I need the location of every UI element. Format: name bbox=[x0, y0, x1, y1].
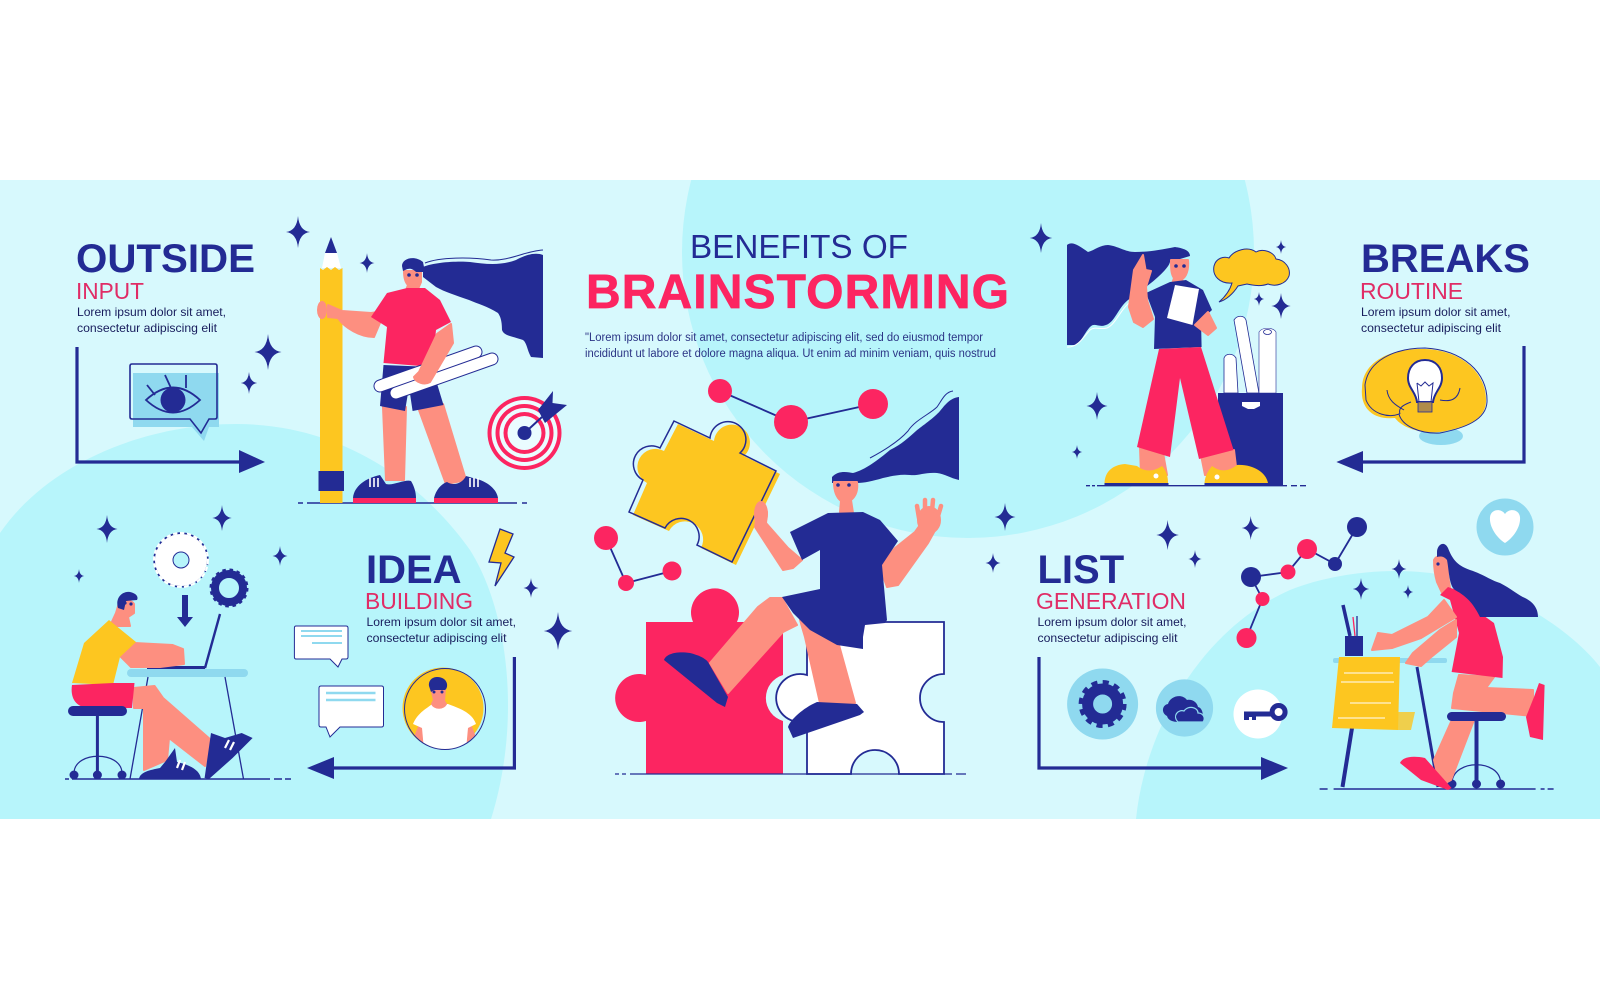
section: list generation text bbox=[1036, 548, 1186, 645]
stars: centre bbox=[986, 503, 1016, 573]
section: outside input text: OUTSIDE bbox=[76, 237, 255, 281]
illustration: woman with paper bbox=[1067, 243, 1268, 486]
arrow: list generation bbox=[1039, 657, 1288, 780]
stars: list generation bbox=[1156, 516, 1413, 600]
icon: navy gear bbox=[212, 570, 246, 606]
section: idea building text: Lorem ipsum dolor sit amet, bbox=[366, 615, 516, 629]
section: list generation text: LIST bbox=[1038, 548, 1124, 592]
illustration: person holding pencil bbox=[318, 250, 543, 503]
infographic canvas bbox=[0, 180, 1600, 819]
intro paragraph bbox=[585, 332, 996, 360]
puzzle piece: yellow held bbox=[629, 421, 780, 565]
icon: box with rolled papers bbox=[1218, 316, 1283, 486]
ground line: centre bbox=[615, 773, 968, 775]
section: outside input text: Lorem ipsum dolor sit amet, bbox=[77, 305, 226, 319]
ground line: idea building bbox=[65, 778, 294, 780]
stars: idea building bbox=[74, 505, 572, 650]
icon: chat bubble one bbox=[294, 626, 348, 667]
icon: brain with light bulb bbox=[1362, 348, 1487, 445]
section: idea building text: BUILDING bbox=[365, 588, 473, 614]
main title bbox=[586, 228, 1009, 319]
arrow: breaks routine bbox=[1336, 346, 1524, 473]
ground line: list generation bbox=[1320, 788, 1555, 790]
icon: eye speech bubble bbox=[130, 364, 219, 441]
arrow: idea building bbox=[307, 657, 514, 779]
section: breaks routine text: ROUTINE bbox=[1360, 278, 1463, 304]
ground line: outside input bbox=[298, 502, 527, 504]
icon: avatar portrait bbox=[402, 668, 486, 750]
section: outside input text: consectetur adipiscing elit bbox=[77, 321, 218, 335]
illustration: giant pencil bbox=[318, 237, 344, 503]
section: outside input text bbox=[76, 237, 255, 335]
section: breaks routine text bbox=[1360, 237, 1530, 335]
intro paragraph: incididunt ut labore et dolore magna aliqua. Ut enim ad minim veniam, quis nostrud bbox=[585, 348, 996, 360]
illustration: woman at desk on stool bbox=[1372, 544, 1545, 790]
section: breaks routine text: consectetur adipiscing elit bbox=[1361, 321, 1502, 335]
intro paragraph: "Lorem ipsum dolor sit amet, consectetur adipiscing elit, sed do eiusmod tempor bbox=[585, 332, 983, 344]
section: idea building text bbox=[365, 548, 516, 645]
icon: chat bubble two bbox=[319, 686, 384, 737]
illustration: man at laptop bbox=[68, 592, 253, 780]
icon: key in circle bbox=[1234, 690, 1285, 738]
background band bbox=[0, 180, 1600, 819]
molecule: left of puzzle bbox=[594, 526, 682, 591]
arrow: outside input bbox=[77, 347, 265, 473]
main title: BRAINSTORMING bbox=[586, 266, 1009, 319]
section: idea building text: IDEA bbox=[366, 548, 462, 592]
stars: outside input bbox=[241, 216, 374, 394]
illustration: woman on puzzle bbox=[664, 391, 959, 738]
illustration: desk with paper and pens bbox=[1332, 605, 1447, 787]
section: breaks routine text: BREAKS bbox=[1361, 237, 1530, 281]
icon: white gear bbox=[154, 533, 208, 587]
molecule: chain bbox=[1236, 517, 1367, 648]
icon: thought cloud bbox=[1214, 249, 1289, 302]
icon: target with arrow bbox=[488, 391, 567, 470]
main title: BENEFITS OF bbox=[690, 228, 908, 265]
icon: lightning bolt bbox=[489, 529, 514, 586]
section: outside input text: INPUT bbox=[76, 278, 144, 304]
icon: gear in circle bbox=[1067, 668, 1138, 740]
puzzle piece: white bbox=[776, 622, 944, 774]
section: breaks routine text: Lorem ipsum dolor sit amet, bbox=[1361, 305, 1510, 319]
puzzle piece: red bbox=[615, 588, 783, 774]
section: list generation text: GENERATION bbox=[1036, 588, 1186, 614]
icon: heart circle bbox=[1476, 498, 1534, 556]
arrow: down from gears bbox=[177, 595, 193, 627]
molecule: top centre bbox=[708, 379, 888, 439]
section: idea building text: consectetur adipiscing elit bbox=[366, 631, 507, 645]
section: list generation text: consectetur adipiscing elit bbox=[1038, 631, 1178, 645]
ground line: breaks routine bbox=[1086, 485, 1308, 487]
icon: cloud in circle bbox=[1156, 679, 1213, 737]
stars: breaks routine bbox=[1030, 223, 1291, 459]
section: list generation text: Lorem ipsum dolor sit amet, bbox=[1038, 615, 1186, 629]
